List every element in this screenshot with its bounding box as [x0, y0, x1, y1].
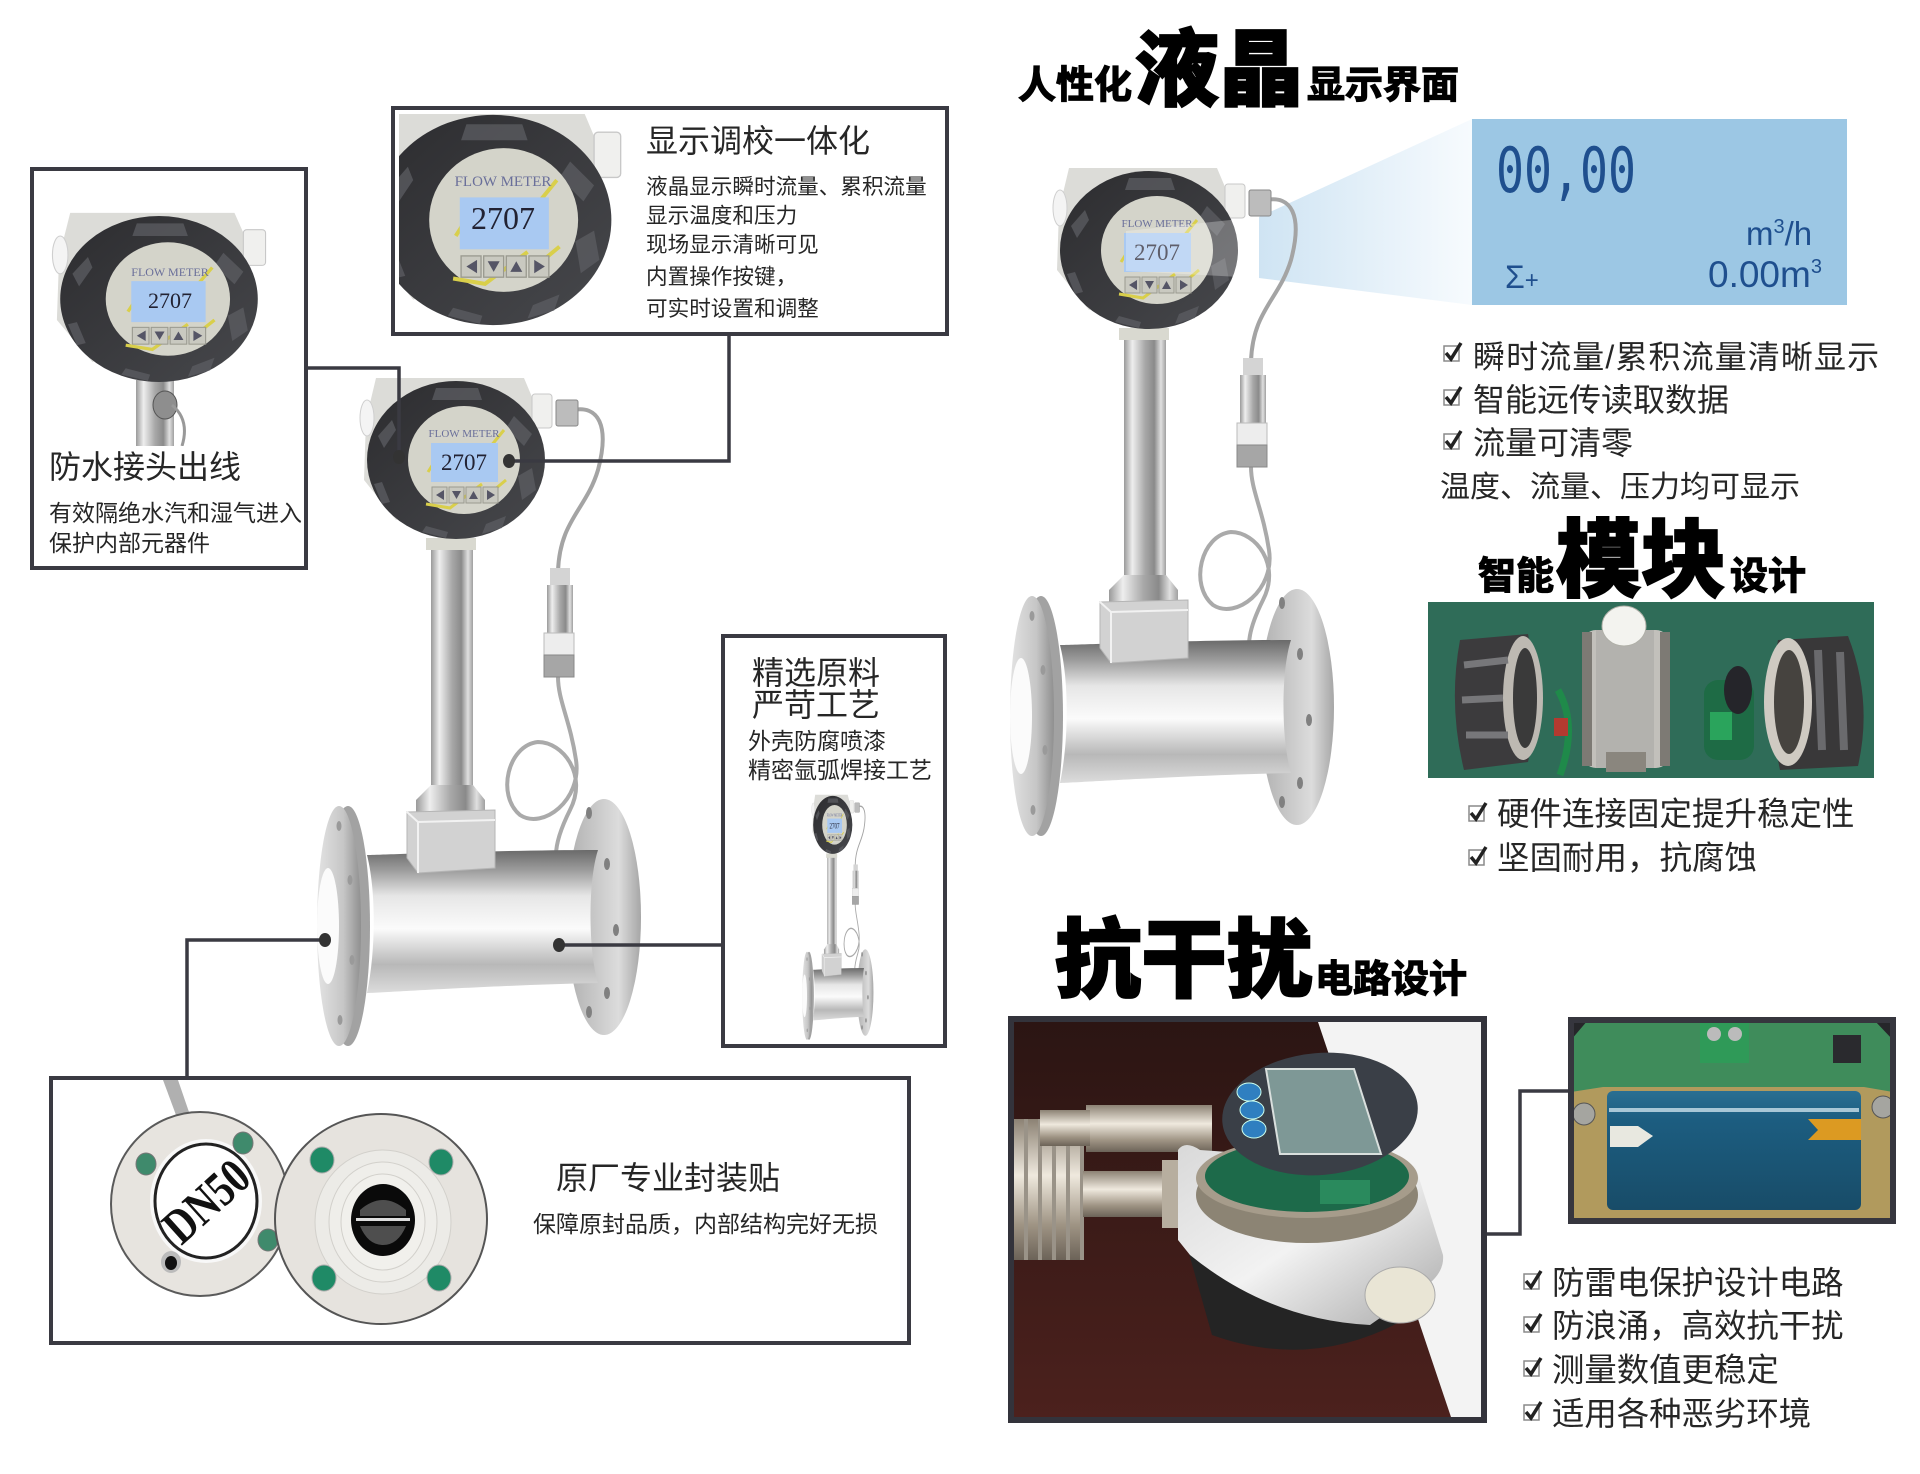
panel: LCD readout: 00,00	[1496, 134, 1636, 207]
icon: circuit boards	[1554, 666, 1754, 775]
title: 抗干扰电路设计: 电路设计	[1315, 959, 1467, 1001]
icon: enlarged LCD head: FLOW METER	[455, 174, 551, 190]
panel: 显示调校一体化: 现场显示清晰可见	[646, 232, 819, 257]
icon: left cap	[1455, 634, 1543, 770]
panel: 精选原料 严苛工艺: 严苛工艺	[752, 687, 880, 723]
panel: 防水接头出线: 防水接头出线	[49, 449, 241, 485]
icon: enlarged LCD head: 2707	[471, 200, 535, 236]
panel: LCD readout: 0.00m	[1708, 254, 1811, 295]
panel: 精选原料 严苛工艺	[723, 636, 945, 1046]
panel: 精选原料 严苛工艺: 精选原料	[752, 655, 880, 691]
panel: LCD readout: 3	[1774, 216, 1785, 238]
icon: meter head close-up	[52, 213, 266, 450]
list: LCD features: 温度、流量、压力均可显示	[1440, 471, 1800, 504]
list: module features: 坚固耐用，抗腐蚀	[1497, 840, 1757, 876]
list: module features	[1469, 796, 1855, 876]
panel: 原厂专业封装贴: 保障原封品质，内部结构完好无损	[533, 1211, 878, 1237]
connector: waterproof joint callout	[306, 368, 405, 464]
panel: 显示调校一体化: 可实时设置和调整	[646, 296, 819, 321]
graphic: light beam from display	[1259, 119, 1472, 305]
title: 人性化液晶显示界面	[1018, 23, 1459, 117]
icon: meter head close-up: 2707	[148, 288, 192, 313]
panel: 防水接头出线: 保护内部元器件	[49, 530, 210, 556]
list: LCD features: 瞬时流量/累积流量清晰显示	[1473, 339, 1880, 375]
list: circuit features: 测量数值更稳定	[1552, 1352, 1779, 1388]
panel: LCD readout: 3	[1811, 256, 1822, 278]
list: circuit features: 防浪涌，高效抗干扰	[1552, 1308, 1844, 1344]
graphic: beam overlay on head	[1126, 217, 1259, 278]
list: circuit features	[1524, 1265, 1844, 1432]
title: 智能模块设计: 设计	[1730, 556, 1806, 598]
panel: 防水接头出线	[32, 169, 306, 568]
panel: 显示调校一体化: 内置操作按键，	[646, 264, 797, 289]
illustration: right flow meter	[1010, 168, 1334, 836]
photo: open meter on table	[1011, 1019, 1484, 1420]
panel: 原厂专业封装贴	[51, 1078, 909, 1343]
list: LCD features: 智能远传读取数据	[1473, 382, 1729, 418]
photo: disassembled modules	[1428, 602, 1874, 778]
panel: 显示调校一体化: 液晶显示瞬时流量、累积流量	[646, 174, 927, 199]
connector: seal callout	[187, 933, 331, 1078]
panel: LCD readout: m	[1746, 215, 1774, 252]
panel: LCD readout: Σ+	[1505, 259, 1539, 295]
list: LCD features: 流量可清零	[1473, 425, 1633, 461]
title: 智能模块设计	[1478, 514, 1806, 609]
panel: 显示调校一体化: 显示温度和压力	[646, 203, 797, 228]
icon: mini meter	[802, 795, 873, 1040]
title: 智能模块设计: 模块	[1556, 514, 1726, 609]
list: module features: 硬件连接固定提升稳定性	[1497, 796, 1855, 832]
panel: 显示调校一体化	[365, 108, 947, 334]
icon: flange bore view	[275, 1114, 487, 1324]
panel: LCD readout	[1472, 119, 1847, 305]
connector: display callout	[503, 334, 729, 468]
panel: 防水接头出线: 有效隔绝水汽和湿气进入	[49, 500, 302, 526]
photo: battery and circuit board	[1571, 1020, 1894, 1221]
icon: DN50 sealed flange	[111, 1080, 289, 1296]
icon: housing	[1178, 1138, 1443, 1350]
panel: LCD readout: /h	[1785, 215, 1812, 252]
title: 人性化液晶显示界面: 显示界面	[1307, 65, 1459, 107]
panel: 原厂专业封装贴: 原厂专业封装贴	[556, 1160, 780, 1196]
panel: 精选原料 严苛工艺: 外壳防腐喷漆	[748, 728, 886, 754]
icon: right cap	[1764, 636, 1864, 770]
icon: enlarged LCD head	[399, 114, 622, 326]
title: 抗干扰电路设计: 抗干扰	[1055, 913, 1313, 1009]
connector: circuit callout	[1487, 1091, 1571, 1234]
icon: DN50 sealed flange: DN50	[151, 1148, 261, 1254]
icon: bellows and tubes	[1012, 1105, 1212, 1260]
panel: 显示调校一体化: 显示调校一体化	[646, 123, 870, 159]
list: circuit features: 防雷电保护设计电路	[1552, 1265, 1844, 1301]
list: LCD features	[1440, 339, 1880, 504]
title: 智能模块设计: 智能	[1478, 556, 1554, 598]
connector: material callout	[553, 938, 723, 952]
title: 人性化液晶显示界面: 人性化	[1018, 65, 1132, 107]
icon: meter head close-up: FLOW METER	[131, 265, 209, 279]
icon: center housing	[1582, 606, 1670, 772]
icon: display disc	[1222, 1052, 1418, 1176]
illustration: main flow meter	[317, 378, 641, 1046]
list: circuit features: 适用各种恶劣环境	[1552, 1396, 1811, 1432]
panel: 精选原料 严苛工艺: 精密氩弧焊接工艺	[748, 757, 932, 783]
title: 抗干扰电路设计	[1055, 913, 1467, 1009]
title: 人性化液晶显示界面: 液晶	[1135, 23, 1303, 117]
